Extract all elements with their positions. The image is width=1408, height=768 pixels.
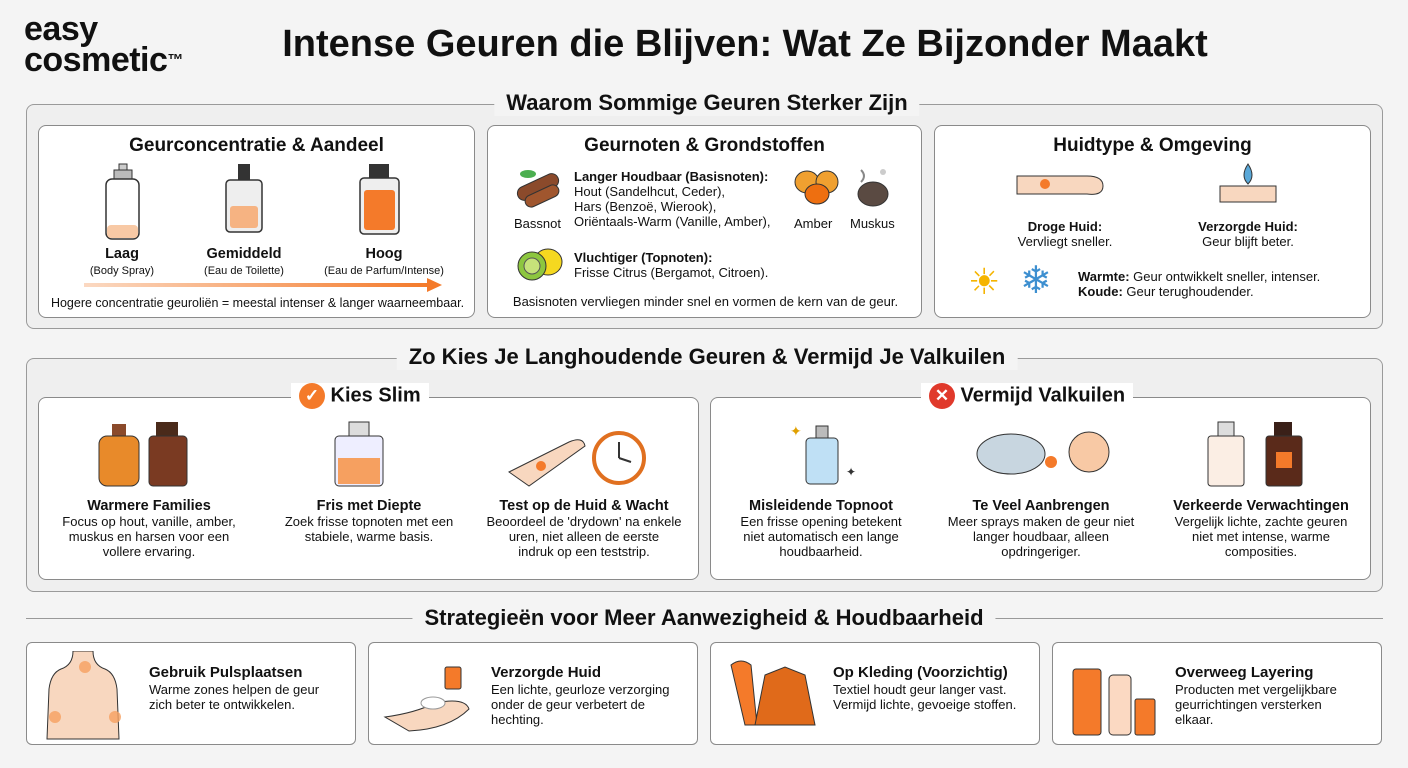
panel heading: Geurconcentratie & Aandeel [129,135,384,156]
icon: warm bottles [98,422,188,486]
heading: ✕ [935,386,949,405]
text [833,664,1016,712]
logo: easy [24,10,98,48]
heading: Kies Slim [331,384,421,406]
section heading: Zo Kies Je Langhoudende Geuren & Vermijd Je Valkuilen [409,344,1005,369]
text: droge huid: Vervliegt sneller. [1018,234,1112,249]
heading [921,383,1133,409]
text: warmte: Koude: Geur terughoudender. [1078,284,1254,299]
panel: huidtype [934,125,1371,318]
icon: bottles [105,164,400,240]
panel: kies slim [38,397,699,580]
icon: citrus [518,248,562,280]
icon: muskus [858,169,888,206]
text: Test op de Huid & Wacht [499,498,669,514]
text: droge huid [1018,219,1112,249]
text: Een frisse opening betekent [740,514,902,529]
icon: spray [790,423,856,484]
text: topnoten: Vluchtiger (Topnoten): [574,250,712,265]
text: composities. [1225,544,1297,559]
logo [24,10,183,79]
icon: wood [516,170,560,208]
icon: fris bottle [334,422,384,486]
panel: vermijd [710,397,1371,580]
icon: amber [794,170,838,204]
labels: (Body Spray) [90,265,154,277]
heading [291,383,429,409]
panel heading: Huidtype & Omgeving [1053,135,1252,156]
icon: body [46,651,121,740]
icon: scarf jacket [730,660,816,726]
note: Hogere concentratie geuroliën = meestal intenser & langer waarneembaar. [51,296,464,310]
icon: snowflake: ❄ [1020,260,1052,302]
panel: geurnoten: Bassnot [514,216,561,231]
title: Intense Geuren die Blijven: Wat Ze Bijzonder Maakt [282,23,1208,65]
text: niet met intense, warme [1192,529,1330,544]
card: kleding [710,642,1040,745]
card: pulsplaatsen [26,642,356,745]
text: warmte [1078,269,1320,299]
text [486,498,682,559]
icon: cloud + face [976,432,1110,474]
text: Gebruik Pulsplaatsen [149,664,302,681]
text: Beoordeel de 'drydown' na enkele [486,514,682,529]
text: Focus op hout, vanille, amber, [62,514,236,529]
text: niet automatisch een lange [743,529,899,544]
text: muskus en harsen voor een [69,529,229,544]
text [62,498,236,559]
logo: cosmetic™ [24,41,183,79]
text: basisnoten: Oriëntaals-Warm (Vanille, Amber), [574,214,770,229]
text: basisnoten: Langer Houdbaar (Basisnoten): [574,169,768,184]
text: Warmere Families [87,498,211,514]
icon: sun: ☀ [968,261,1000,302]
arrow [84,278,442,292]
text: Vermijd lichte, gevoeige stoffen. [833,697,1016,712]
text: opdringeriger. [1001,544,1081,559]
text [491,664,670,727]
text [149,664,319,712]
labels: Laag [105,246,139,262]
panel: concentratie: Gemiddeld [207,246,281,262]
text: basisnoten: Hout (Sandelhcut, Ceder), [574,184,725,199]
text: Verzorgde Huid [491,664,601,681]
text: verzorgde huid: Verzorgde Huid: [1198,219,1298,234]
panel: concentratie: (Eau de Parfum/Intense) [324,265,444,277]
icon: hand [384,666,470,732]
text [1175,664,1337,727]
panel: concentratie: Hoog [365,246,403,262]
text: Overweeg Layering [1175,664,1313,681]
icon: spray: ✦ [790,423,802,439]
text: hechting. [491,712,544,727]
text [1173,498,1349,559]
text: uren, niet alleen de eerste [509,529,659,544]
text: Misleidende Topnoot [749,498,893,514]
text: verzorgde huid [1198,219,1298,249]
text: topnoten [574,250,768,280]
text: Warme zones helpen de geur [149,682,319,697]
section 2: kies [26,358,1383,592]
icon: arm [1016,176,1104,195]
text: langer houdbaar, alleen [973,529,1109,544]
text: Meer sprays maken de geur niet [948,514,1134,529]
text: warmte: Warmte: Geur ontwikkelt sneller, intenser. [1078,269,1320,284]
section heading: Waarom Sommige Geuren Sterker Zijn [506,90,908,115]
text: elkaar. [1175,712,1213,727]
section 1: waarom [26,104,1383,329]
text: onder de geur verbetert de [491,697,645,712]
icon: spray: ✦ [846,465,856,479]
text: basisnoten [574,169,770,229]
text: stabiele, warme basis. [305,529,433,544]
text: Vergelijk lichte, zachte geuren [1175,514,1347,529]
panel: geurnoten: Amber [794,216,832,231]
panel: concentratie: (Eau de Toilette) [204,265,284,277]
icon: wrist + clock [508,431,646,487]
panel heading: Geurnoten & Grondstoffen [584,135,825,156]
text: basisnoten: Hars (Benzoë, Wierook), [574,199,716,214]
text: topnoten: Frisse Citrus (Bergamot, Citroen). [574,265,768,280]
panel: geurnoten [487,125,922,318]
text [285,498,453,544]
text: Op Kleding (Voorzichtig) [833,664,1008,681]
text: Een lichte, geurloze verzorging [491,682,670,697]
text: geurrichtingen versterken [1175,697,1322,712]
icon: bottles compare [1208,422,1302,486]
labels [90,246,154,277]
card: verzorgde huid [368,642,698,745]
text: Fris met Diepte [317,498,421,514]
icon: skin drop [1220,163,1276,202]
heading: Vermijd Valkuilen [961,384,1125,406]
text: Textiel houdt geur langer vast. [833,682,1006,697]
card: layering [1052,642,1382,745]
heading: ✓ [305,386,319,405]
text: zich beter te ontwikkelen. [149,697,295,712]
note: Basisnoten vervliegen minder snel en vormen de kern van de geur. [513,294,898,309]
panel: concentratie [38,125,475,318]
text: verzorgde huid: Geur blijft beter. [1202,234,1294,249]
text [948,498,1134,559]
panel: geurnoten: Muskus [850,216,895,231]
section heading: Strategieën voor Meer Aanwezigheid & Houdbaarheid [424,605,984,630]
text: vollere ervaring. [103,544,195,559]
icon: products [1072,668,1156,736]
text: indruk op een teststrip. [518,544,650,559]
text: houdbaarheid. [779,544,863,559]
text: droge huid: Droge Huid: [1028,219,1102,234]
text: Te Veel Aanbrengen [972,498,1110,514]
text: Verkeerde Verwachtingen [1173,498,1349,514]
text: Producten met vergelijkbare [1175,682,1337,697]
text: Zoek frisse topnoten met een [285,514,453,529]
text [740,498,902,559]
